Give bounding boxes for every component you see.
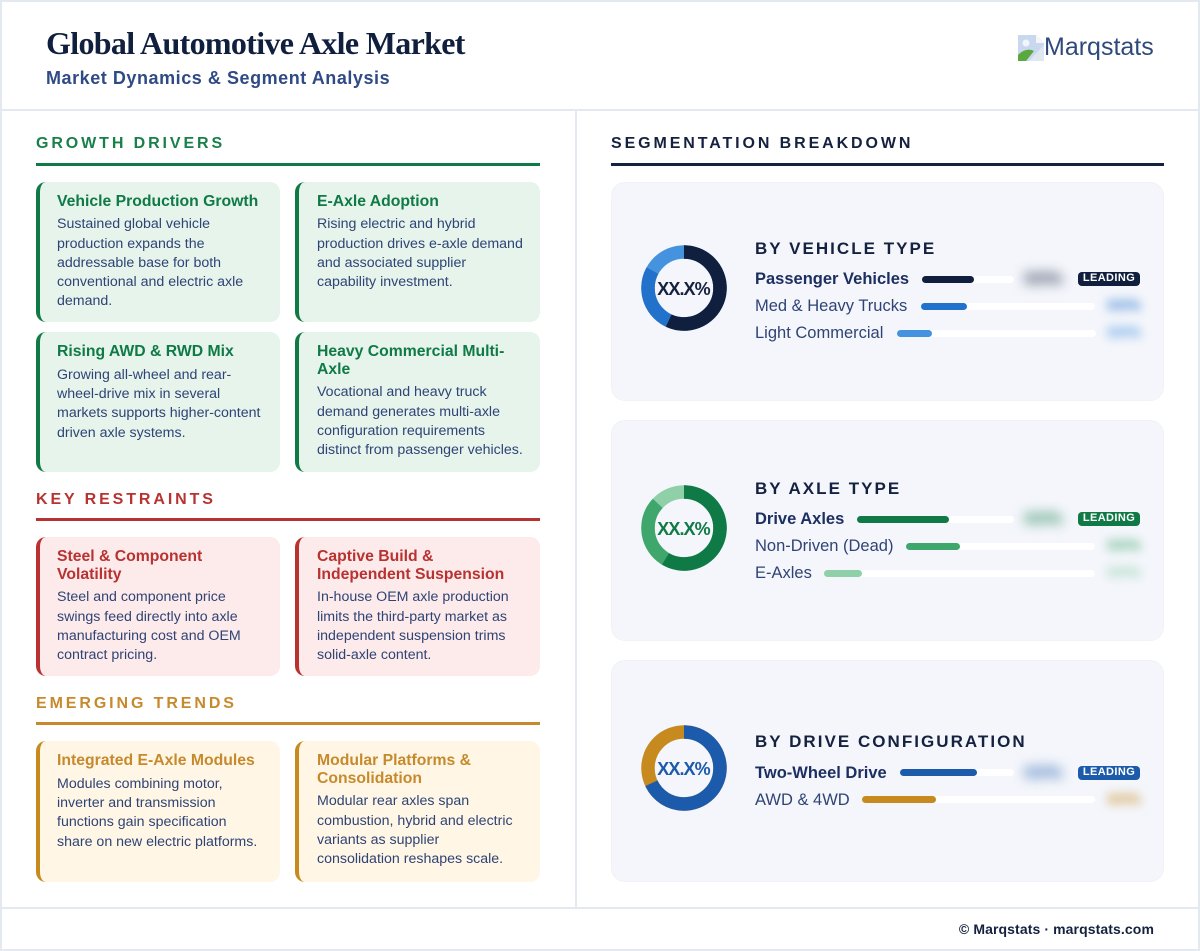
card: vehicle production growth bbox=[36, 182, 280, 322]
card: steel and component volatility: manufacturing cost and OEM bbox=[57, 628, 241, 644]
card: vehicle production growth: addressable base for both bbox=[57, 255, 221, 271]
panel: by drive configuration: XX% bbox=[1107, 791, 1140, 808]
card: heavy commercial multi-axle: configuration requirements bbox=[317, 423, 485, 439]
card: captive build and independent suspension: In-house OEM axle production bbox=[317, 589, 509, 605]
card: e-axle adoption: production drives e-axle demand bbox=[317, 236, 523, 252]
heading: growth drivers: GROWTH DRIVERS bbox=[36, 135, 225, 152]
card: modular platforms and consolidation: consolidation reshapes scale. bbox=[317, 851, 503, 867]
heading: emerging trends: EMERGING TRENDS bbox=[36, 695, 237, 712]
card: e-axle adoption: E-Axle Adoption bbox=[317, 193, 439, 210]
card: heavy commercial multi-axle bbox=[295, 332, 540, 472]
card: rising awd and rwd mix: Growing all-wheel and rear- bbox=[57, 367, 231, 383]
donut: axle type: XX.X% bbox=[657, 519, 711, 539]
row: e-axles: E-Axles bbox=[755, 564, 812, 582]
card: e-axle adoption: capability investment. bbox=[317, 274, 453, 290]
subtitle: Market Dynamics & Segment Analysis bbox=[46, 68, 390, 88]
card: e-axle adoption bbox=[295, 182, 540, 322]
card: modular platforms and consolidation: combustion, hybrid and electric bbox=[317, 813, 513, 829]
panel: by vehicle type: XX% bbox=[1024, 269, 1062, 288]
badge: leading: LEADING bbox=[1083, 766, 1135, 778]
card: heavy commercial multi-axle: Axle bbox=[317, 361, 350, 378]
card: modular platforms and consolidation: Modular Platforms & bbox=[317, 752, 471, 769]
heading: segmentation breakdown: SEGMENTATION BREAKDOWN bbox=[611, 135, 913, 152]
row: non-driven: Non-Driven (Dead) bbox=[755, 537, 893, 555]
card: captive build and independent suspension bbox=[295, 537, 540, 676]
card: rising awd and rwd mix: markets supports higher-content bbox=[57, 405, 260, 421]
panel: by drive configuration bbox=[611, 660, 1164, 882]
donut: axle type bbox=[641, 485, 727, 571]
donut: vehicle type bbox=[641, 245, 727, 331]
card: modular platforms and consolidation: Modular rear axles span bbox=[317, 793, 469, 809]
card: rising awd and rwd mix: wheel-drive mix in several bbox=[57, 386, 220, 402]
panel: by axle type: XX% bbox=[1107, 564, 1140, 581]
card: rising awd and rwd mix: driven axle systems. bbox=[57, 424, 186, 440]
title: Global Automotive Axle Market bbox=[46, 25, 465, 61]
card: rising awd and rwd mix bbox=[36, 332, 280, 472]
segmentation rule bbox=[611, 163, 1164, 166]
card: steel and component volatility bbox=[36, 537, 280, 676]
panel title: BY DRIVE CONFIGURATION bbox=[755, 732, 1027, 751]
card: steel and component volatility: contract pricing. bbox=[57, 647, 157, 663]
card: captive build and independent suspension: Captive Build & bbox=[317, 548, 433, 565]
card: steel and component volatility: Steel and component price bbox=[57, 589, 226, 605]
card: integrated e-axle modules bbox=[36, 741, 280, 882]
footer text: © Marqstats · marqstats.com bbox=[959, 921, 1154, 937]
row: drive axles: Drive Axles bbox=[755, 510, 844, 528]
card: vehicle production growth: Vehicle Production Growth bbox=[57, 193, 258, 210]
footer divider bbox=[0, 907, 1200, 909]
card: e-axle adoption: and associated supplier bbox=[317, 255, 466, 271]
panel: by vehicle type: XX% bbox=[1107, 297, 1140, 314]
card: steel and component volatility: swings feed directly into axle bbox=[57, 609, 238, 625]
card: heavy commercial multi-axle: Vocational and heavy truck bbox=[317, 384, 487, 400]
card: e-axle adoption: Rising electric and hybrid bbox=[317, 216, 476, 232]
card: rising awd and rwd mix: Rising AWD & RWD Mix bbox=[57, 343, 234, 360]
key restraints rule bbox=[36, 518, 540, 521]
card: captive build and independent suspension: limits the third-party market as bbox=[317, 609, 507, 625]
row: passenger vehicles: Passenger Vehicles bbox=[755, 270, 909, 288]
panel title: BY VEHICLE TYPE bbox=[755, 239, 936, 258]
card: captive build and independent suspension: solid-axle content. bbox=[317, 647, 431, 663]
card: modular platforms and consolidation bbox=[295, 741, 540, 882]
heading: key restraints: KEY RESTRAINTS bbox=[36, 491, 216, 508]
panel: by drive configuration: XX% bbox=[1024, 763, 1062, 782]
card: integrated e-axle modules: functions gain specification bbox=[57, 814, 227, 830]
logo: broken image with alt text: Marqstats bbox=[1044, 33, 1154, 61]
card: vehicle production growth: Sustained global vehicle bbox=[57, 216, 210, 232]
badge: leading: LEADING bbox=[1083, 272, 1135, 284]
row: med and heavy trucks: Med & Heavy Trucks bbox=[755, 297, 907, 315]
card: vehicle production growth: demand. bbox=[57, 293, 112, 309]
card: captive build and independent suspension: independent suspension trims bbox=[317, 628, 506, 644]
card: captive build and independent suspension: Independent Suspension bbox=[317, 566, 504, 583]
donut: drive configuration: XX.X% bbox=[657, 759, 711, 779]
card: integrated e-axle modules: Integrated E-Axle Modules bbox=[57, 752, 255, 769]
panel: by axle type bbox=[611, 420, 1164, 641]
donut: vehicle type: XX.X% bbox=[657, 279, 711, 299]
header divider bbox=[0, 109, 1200, 111]
card: integrated e-axle modules: inverter and transmission bbox=[57, 795, 216, 811]
card: modular platforms and consolidation: variants as supplier bbox=[317, 832, 439, 848]
row: two-wheel drive: Two-Wheel Drive bbox=[755, 764, 887, 782]
card: vehicle production growth: production expands the bbox=[57, 236, 205, 252]
card: steel and component volatility: Volatility bbox=[57, 566, 121, 583]
panel: by axle type: XX% bbox=[1024, 509, 1062, 528]
card: steel and component volatility: Steel & Component bbox=[57, 548, 202, 565]
card: vehicle production growth: conventional and electric axle bbox=[57, 274, 243, 290]
emerging trends rule bbox=[36, 722, 540, 725]
badge: leading: LEADING bbox=[1083, 512, 1135, 524]
donut: drive configuration bbox=[641, 725, 727, 811]
card: heavy commercial multi-axle: Heavy Commercial Multi- bbox=[317, 343, 504, 360]
panel: by vehicle type bbox=[611, 182, 1164, 401]
growth drivers rule bbox=[36, 163, 540, 166]
card: heavy commercial multi-axle: distinct from passenger vehicles. bbox=[317, 442, 523, 458]
panel: by axle type: XX% bbox=[1107, 537, 1140, 554]
card: integrated e-axle modules: Modules combining motor, bbox=[57, 776, 223, 792]
card: integrated e-axle modules: share on new electric platforms. bbox=[57, 834, 257, 850]
row: awd and 4wd: AWD & 4WD bbox=[755, 791, 850, 809]
card: modular platforms and consolidation: Consolidation bbox=[317, 770, 422, 787]
column divider bbox=[575, 110, 577, 908]
row: light commercial: Light Commercial bbox=[755, 324, 883, 342]
panel: by vehicle type: XX% bbox=[1107, 324, 1140, 341]
panel title: BY AXLE TYPE bbox=[755, 479, 901, 498]
card: heavy commercial multi-axle: demand generates multi-axle bbox=[317, 404, 500, 420]
